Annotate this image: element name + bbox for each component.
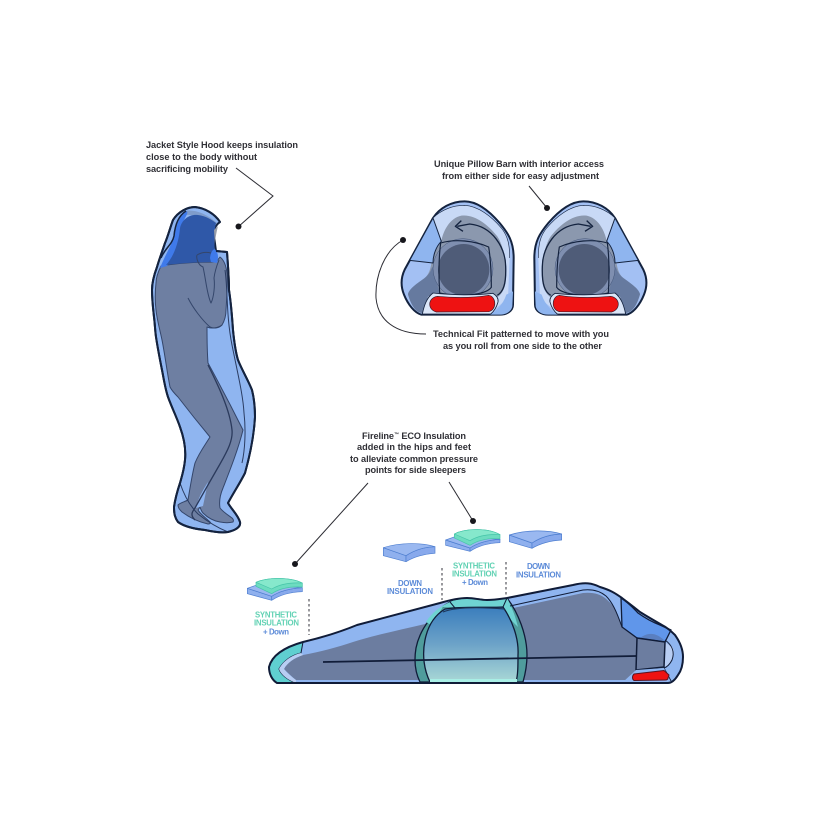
label: down insulation left <box>387 579 433 596</box>
label: down insulation left: INSULATION <box>387 587 433 596</box>
label: synthetic insulation feet: SYNTHETIC <box>255 610 297 620</box>
hood arc <box>664 640 673 681</box>
face sliver <box>214 226 218 245</box>
eye opening band <box>664 642 674 668</box>
hand bright patch <box>210 249 218 263</box>
heading: fireline callout: added in the hips and feet <box>357 442 471 452</box>
label: synthetic insulation hips <box>452 562 497 587</box>
hood light top <box>182 210 217 226</box>
hood bright edge <box>160 211 187 268</box>
panel: jacket style hood <box>146 140 298 532</box>
hood black seam <box>161 211 186 258</box>
hip light upper band <box>426 598 518 627</box>
bag outline <box>152 207 255 532</box>
heading: fireline callout: points for side sleepers <box>365 465 466 475</box>
person silhouette <box>155 257 243 524</box>
hip gradient centre <box>424 607 518 682</box>
icon: synthetic block hips <box>446 530 500 551</box>
hip bottom highlight <box>430 679 517 682</box>
sleeping bag side section <box>269 583 683 683</box>
icon: synthetic block feet <box>247 578 302 600</box>
hood dark blue <box>166 215 216 265</box>
shell outline <box>269 583 683 683</box>
center line <box>323 656 637 662</box>
heading: fireline callout <box>350 431 478 475</box>
face box <box>636 638 665 670</box>
foot teal cap <box>269 642 303 683</box>
hood blue <box>621 598 671 642</box>
label: synthetic insulation hips: + Down <box>462 578 488 587</box>
heading: hood callout: close to the body without <box>146 152 257 162</box>
dashed dividers <box>309 562 506 635</box>
heading: technical fit callout: as you roll from one side to the other <box>443 341 602 351</box>
pillow red <box>632 670 669 680</box>
label: synthetic insulation feet <box>254 610 299 636</box>
heading: fireline callout: to alleviate common pressure <box>350 454 478 464</box>
heading: hood callout <box>146 140 298 174</box>
panel: fireline eco insulation <box>247 431 683 683</box>
label: synthetic insulation hips: SYNTHETIC <box>453 562 495 570</box>
left pod cross-section <box>402 201 514 315</box>
label: down insulation right <box>516 562 561 580</box>
label: synthetic insulation feet: INSULATION <box>254 618 299 628</box>
bag shell <box>269 583 683 683</box>
heading: fireline callout: ECO Insulation <box>399 431 466 441</box>
arrow: hips leader <box>449 482 476 524</box>
inner grey fill <box>284 593 674 680</box>
heading: fireline callout: ™ <box>394 432 399 438</box>
label: down insulation left: DOWN <box>398 579 422 588</box>
heading: technical fit callout: Technical Fit patterned to move with you <box>433 329 609 339</box>
icon: down block right <box>509 531 562 548</box>
label: down insulation right: DOWN <box>527 562 550 571</box>
bag front seam <box>225 270 245 463</box>
figure in sleeping bag <box>152 207 255 532</box>
label: synthetic insulation feet: + Down <box>263 628 289 636</box>
bag outer shell <box>152 207 255 532</box>
arrow: feet leader <box>292 483 368 567</box>
label: down insulation right: INSULATION <box>516 570 561 580</box>
bag back seam <box>180 483 228 532</box>
arrow: technical fit leader <box>376 237 426 334</box>
heading: hood callout: Jacket Style Hood keeps insulation <box>146 140 298 150</box>
heading: pillow barn callout: from either side for easy adjustment <box>442 171 599 181</box>
hip band dividers <box>450 598 507 608</box>
hip teal dark band <box>415 598 527 682</box>
arrow: hood leader <box>236 168 273 230</box>
heading: fireline callout: Fireline <box>362 431 394 441</box>
hip stitch line <box>443 608 505 612</box>
heading: technical fit callout <box>433 329 609 351</box>
icon: down block left <box>383 544 435 562</box>
heading: hood callout: sacrificing mobility <box>146 164 229 174</box>
label: synthetic insulation hips: INSULATION <box>452 570 497 578</box>
light foot inner band <box>279 653 303 683</box>
arrow: pillow barn leader <box>529 186 550 211</box>
gap between legs <box>196 482 208 508</box>
bottom wedge <box>623 668 671 682</box>
hood shadow <box>640 634 665 641</box>
panel: pillow barn and technical fit <box>376 159 646 351</box>
heading: pillow barn callout: Unique Pillow Barn with interior access <box>434 159 604 169</box>
heading: pillow barn callout <box>434 159 604 181</box>
bag inner seam lines <box>510 590 622 627</box>
front leg line <box>192 365 232 520</box>
right pod cross-section <box>534 201 646 315</box>
arm and hand lines <box>188 252 222 328</box>
